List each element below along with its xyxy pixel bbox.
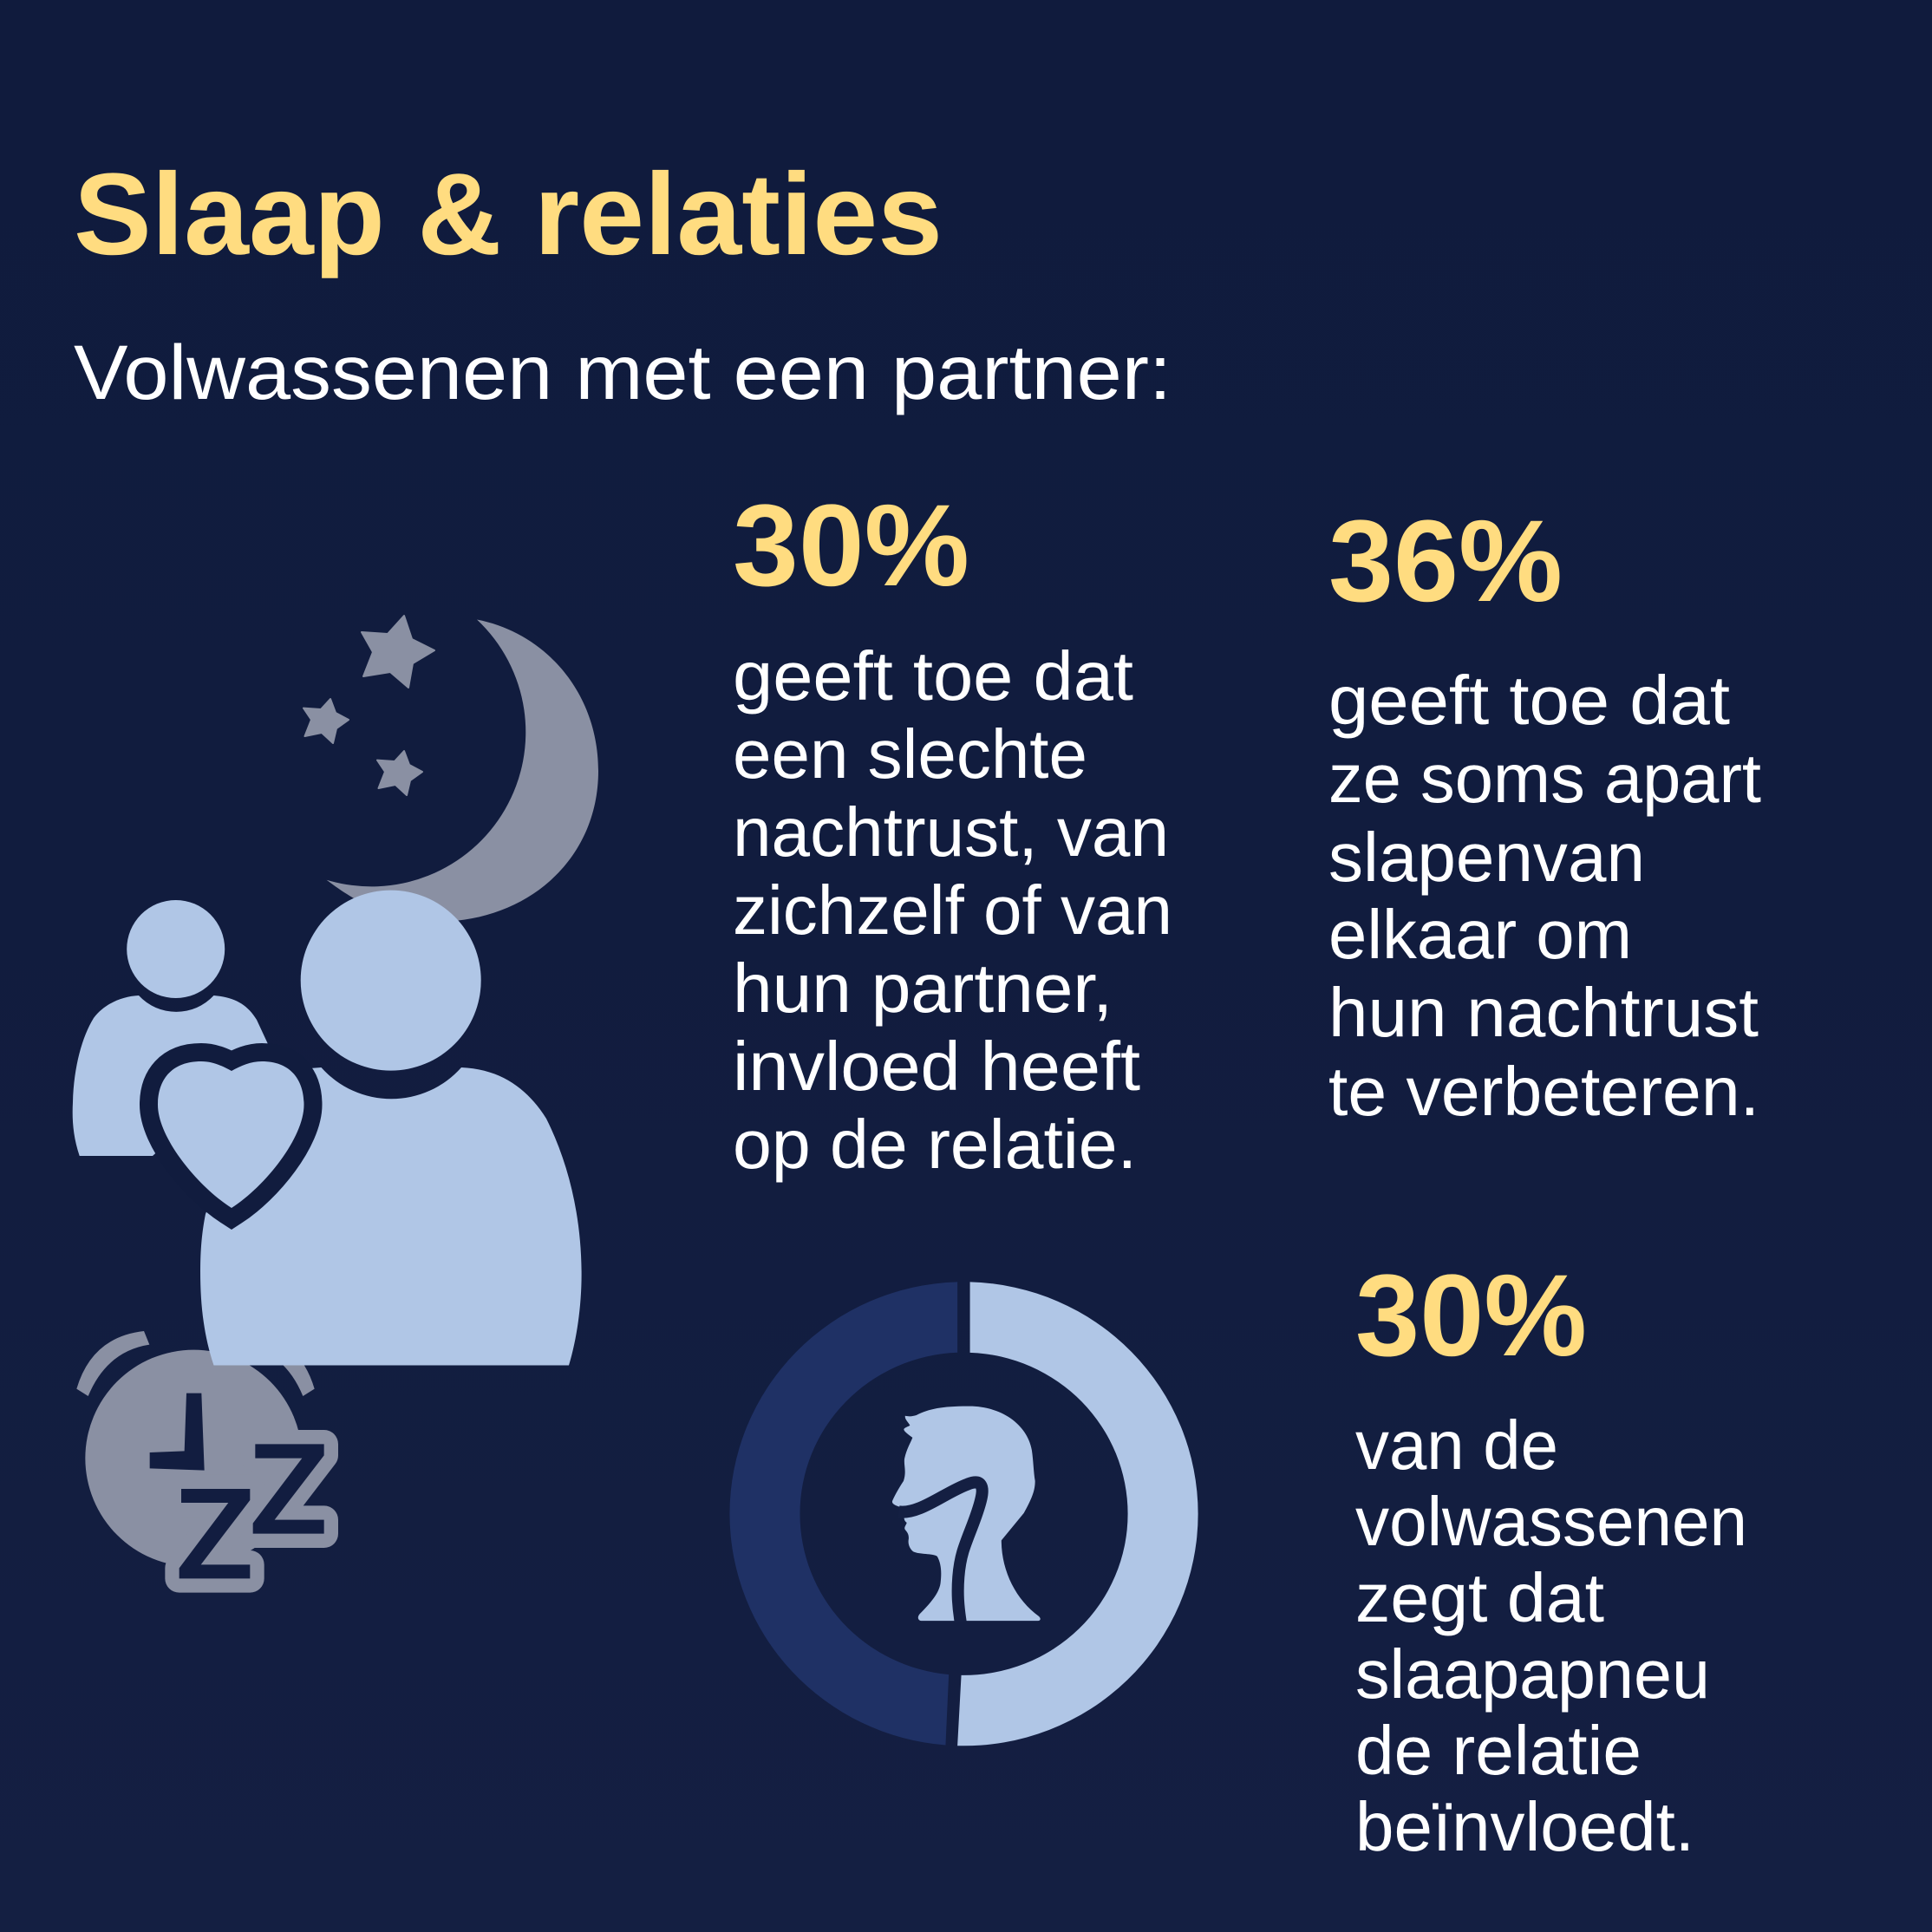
title: Slaap & relaties [74, 150, 943, 279]
stat description: geeft toe dat [733, 637, 1133, 715]
stat value: 36% [1328, 497, 1563, 626]
stat description: een slechte [733, 715, 1087, 793]
large person head [301, 891, 481, 1071]
subtitle: Volwassenen met een partner: [74, 329, 1172, 415]
large person body [200, 1067, 582, 1365]
icon: small star left [304, 699, 349, 743]
icon: alarm clock with zzz [76, 1331, 324, 1578]
stat description: zegt dat [1355, 1559, 1604, 1636]
stat description: invloed heeft [733, 1028, 1140, 1105]
stat description: van de [1355, 1407, 1558, 1484]
stat block: 36% sleep apart [1328, 497, 1761, 1130]
letter Z lower [179, 1489, 250, 1578]
clock hands [150, 1394, 205, 1471]
stat description: te verbeteren. [1328, 1053, 1759, 1130]
stat description: slapenvan [1328, 819, 1645, 896]
icon: crescent moon [327, 619, 598, 922]
stat description: hun partner, [733, 950, 1113, 1027]
stat value: 30% [1355, 1251, 1587, 1380]
icon: small star right [377, 751, 422, 795]
donut segment: light share [957, 1282, 1198, 1746]
stat description [1355, 1407, 1747, 1865]
small person body [73, 995, 268, 1156]
stat block: 30% sleep apnea [1355, 1251, 1747, 1865]
stat description: slaapapneu [1355, 1635, 1710, 1713]
stat description: de relatie [1355, 1712, 1642, 1789]
clock face [85, 1350, 302, 1567]
stat value: 30% [733, 481, 969, 610]
stat description: zichzelf of van [733, 871, 1172, 949]
stat description: beïnvloedt. [1355, 1788, 1694, 1865]
airway tube [898, 1482, 982, 1622]
icon: moon with stars [304, 616, 598, 922]
stat description: nachtrust, van [733, 793, 1169, 871]
stat description: ze soms apart [1328, 740, 1761, 817]
small person head [127, 900, 225, 998]
letter Z upper [253, 1444, 324, 1534]
head silhouette [892, 1407, 1041, 1621]
stat description [733, 637, 1172, 1183]
icon: large star [362, 616, 434, 688]
icon: couple with heart [73, 891, 582, 1365]
stat description: geeft toe dat [1328, 662, 1730, 739]
stat description: op de relatie. [733, 1106, 1137, 1183]
donut segment: dark remainder [729, 1282, 957, 1745]
icon: head profile with airway [892, 1407, 1041, 1622]
stat description [1328, 662, 1761, 1130]
stat description: hun nachtrust [1328, 974, 1759, 1051]
stat description: elkaar om [1328, 896, 1632, 973]
zzz outline [179, 1444, 324, 1578]
clock bell right [242, 1331, 315, 1396]
stat description: volwassenen [1355, 1483, 1747, 1560]
heart [158, 1061, 304, 1208]
donut chart with head icon [729, 1282, 1198, 1746]
clock bell left [76, 1331, 149, 1396]
stat block: 30% relationship impact [733, 481, 1172, 1183]
